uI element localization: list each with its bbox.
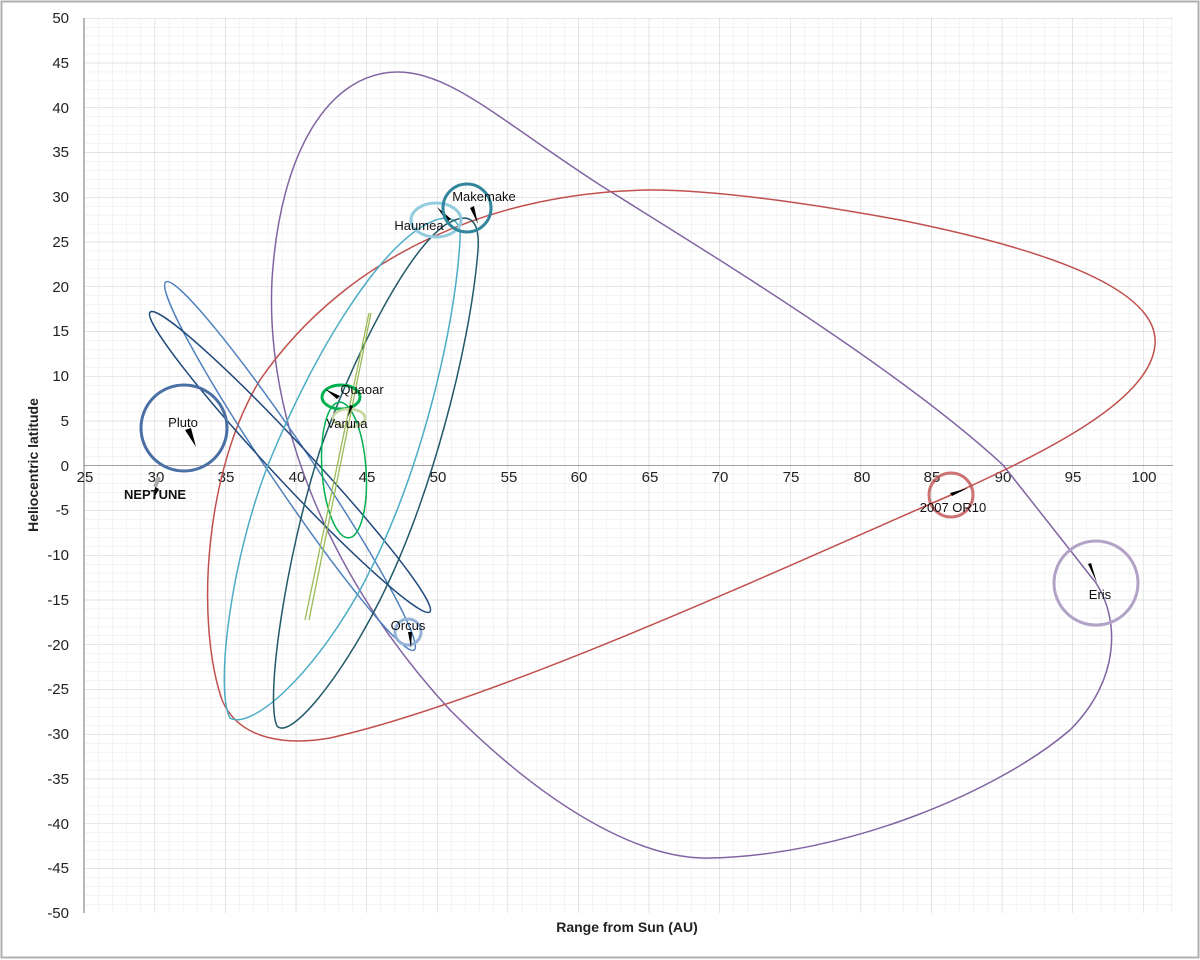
x axis labels: 90 [995,469,1011,486]
y axis labels [47,10,69,922]
planet: Neptune [124,477,186,502]
planet: Pluto: Pluto [168,415,198,430]
orbit: Eris [271,72,1112,858]
planet: 2007 OR10: 2007 OR10 [920,500,986,515]
planet: Makemake: Makemake [452,189,516,204]
planet: Varuna [327,405,368,431]
y axis labels: -50 [47,905,69,922]
y axis labels: -30 [47,726,69,743]
y axis labels: 0 [61,458,69,475]
x axis labels: 35 [218,469,234,486]
x axis labels: 40 [289,469,305,486]
y axis labels: 10 [52,368,69,385]
y axis labels: -5 [56,502,69,519]
orbit: Varuna [305,313,371,620]
x axis labels: 85 [924,469,940,486]
x axis labels: 70 [712,469,728,486]
planet: Orcus [391,618,426,648]
x axis labels: 25 [77,469,93,486]
planet: Quaoar: Quaoar [340,382,384,397]
orbit: Orcus [136,299,444,625]
y axis labels: 25 [52,234,69,251]
y axis labels: -20 [47,637,69,654]
planet: 2007 OR10 [920,473,986,517]
y axis labels: 30 [52,189,69,206]
orbit: Quaoar [317,401,371,539]
x axis labels: 55 [501,469,517,486]
planet: Varuna: Varuna [327,416,368,431]
x axis labels: 30 [148,469,164,486]
y axis labels: 40 [52,100,69,117]
y axis labels: 35 [52,144,69,161]
y axis labels: 45 [52,55,69,72]
y axis labels: -35 [47,771,69,788]
y axis labels: 15 [52,323,69,340]
x axis labels: 60 [571,469,587,486]
x axis labels: 75 [783,469,799,486]
y axis title: Heliocentric latitude [25,398,41,532]
orbit: Makemake [274,218,478,728]
planet: Neptune: NEPTUNE [124,487,186,502]
y axis labels: 5 [61,413,69,430]
x axis labels: 80 [854,469,870,486]
planet: Eris: Eris [1089,587,1112,602]
planet: Quaoar [322,382,384,409]
x axis labels: 100 [1131,469,1157,486]
x axis labels: 65 [642,469,658,486]
planet: Pluto [141,385,227,471]
y axis labels: -25 [47,681,69,698]
planet: Haumea: Haumea [394,218,444,233]
x axis labels: 50 [430,469,446,486]
orbit: Pluto [148,270,432,662]
y axis labels: -10 [47,547,69,564]
planet: Orcus: Orcus [391,618,426,633]
x axis labels [77,469,1157,486]
orbit: 2007 OR10 [208,190,1155,741]
y axis labels: 20 [52,279,69,296]
y axis labels: -15 [47,592,69,609]
y axis labels: -40 [47,816,69,833]
planet: Haumea [394,203,461,237]
x axis title: Range from Sun (AU) [556,919,698,935]
y axis labels: -45 [47,860,69,877]
planet: Makemake [443,184,516,232]
orbit: Haumea [224,218,460,720]
planet: Eris [1054,541,1138,625]
x axis labels: 95 [1065,469,1081,486]
y axis labels: 50 [52,10,69,27]
x axis labels: 45 [359,469,375,486]
